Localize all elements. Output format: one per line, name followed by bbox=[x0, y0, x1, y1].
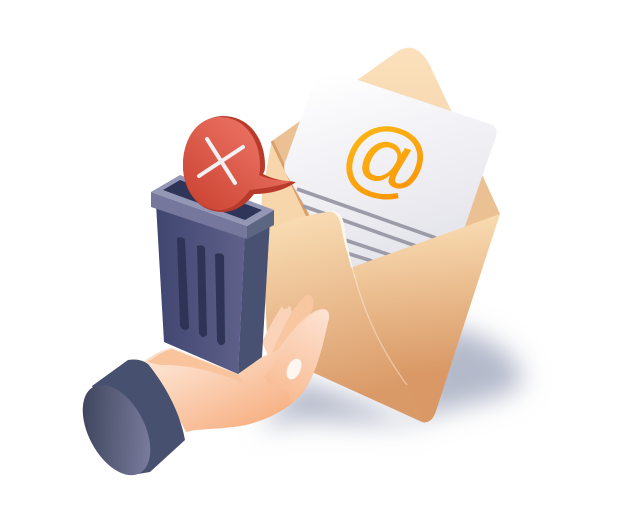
ground shadow bbox=[260, 325, 522, 428]
cuff bbox=[92, 360, 185, 474]
bin rim top bbox=[151, 175, 274, 226]
letter paper bbox=[284, 67, 497, 290]
flap highlight bbox=[330, 211, 356, 280]
trash bin bbox=[151, 175, 274, 374]
finger bbox=[264, 309, 329, 404]
palm bbox=[142, 309, 329, 432]
bin slots bbox=[177, 237, 225, 345]
cuff opening bbox=[69, 374, 164, 486]
back fingers bbox=[262, 305, 296, 372]
envelope inner shade bbox=[272, 100, 500, 280]
envelope left inner panel bbox=[255, 141, 320, 300]
cross mark bbox=[199, 139, 243, 183]
bubble shadow edge bbox=[183, 116, 296, 212]
bin body right bbox=[238, 220, 270, 374]
letter text lines bbox=[297, 189, 436, 261]
speech bubble with cross bbox=[183, 116, 296, 212]
hand bbox=[69, 295, 329, 486]
bin rim front left bbox=[151, 192, 247, 239]
at sign: @ bbox=[330, 100, 442, 218]
envelope bbox=[255, 48, 500, 423]
bin rim front right bbox=[247, 210, 274, 239]
fingernail bbox=[284, 356, 304, 382]
envelope front right panel bbox=[300, 214, 500, 422]
envelope back flap bbox=[272, 48, 500, 300]
thumb highlight bbox=[148, 349, 245, 384]
bin body left bbox=[156, 204, 245, 374]
envelope front left flap bbox=[262, 212, 425, 423]
bin opening bbox=[163, 180, 262, 220]
bubble face bbox=[183, 117, 293, 210]
